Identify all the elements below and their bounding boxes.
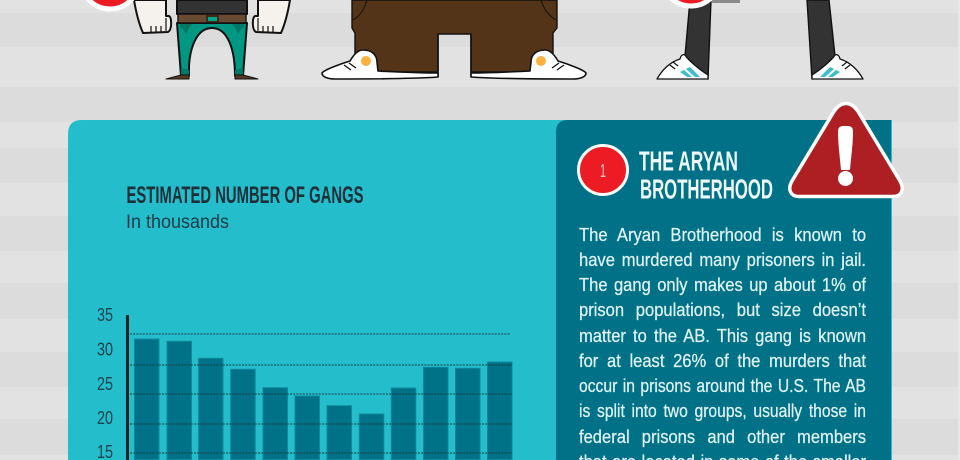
body text: have murdered many prisoners in jail. (579, 250, 866, 270)
chart subtitle: In thousands (126, 212, 229, 233)
y axis labels (97, 305, 113, 460)
y axis labels: 25 (97, 374, 113, 394)
panel: estimated number of gangs (68, 120, 892, 460)
heading: THE ARYAN (639, 146, 738, 176)
badge: right red circle (662, 0, 720, 6)
badge: left red circle (81, 0, 139, 9)
number badge: 1 (600, 161, 606, 181)
character: right gang member (657, 0, 863, 79)
character: left gang member (134, 0, 290, 79)
body text: The Aryan Brotherhood is known to (579, 225, 866, 245)
body text: matter to the AB. This gang is known (579, 326, 866, 346)
panel: aryan brotherhood description (556, 104, 902, 460)
body text: prison populations, but size doesn’t (579, 300, 866, 320)
bar chart (97, 305, 512, 460)
body text: The gang only makes up about 1% of (579, 275, 866, 295)
heading: BROTHERHOOD (640, 174, 773, 204)
y axis labels: 20 (97, 408, 113, 428)
number badge (578, 146, 628, 194)
y axis labels: 35 (97, 305, 113, 325)
body text: federal prisons and other members (579, 427, 866, 447)
heading (639, 146, 773, 204)
body text: occur in prisons around the U.S. The AB (579, 376, 866, 396)
character: middle gang member (322, 0, 586, 79)
body text (579, 225, 866, 460)
chart title: ESTIMATED NUMBER OF GANGS (126, 182, 364, 209)
body text: is split into two groups, usually those in (579, 401, 866, 421)
y axis labels: 30 (97, 340, 113, 360)
icon: warning triangle (790, 104, 902, 196)
bars (134, 339, 512, 460)
y axis line (126, 315, 129, 460)
body text: for at least 26% of the murders that (579, 351, 866, 371)
